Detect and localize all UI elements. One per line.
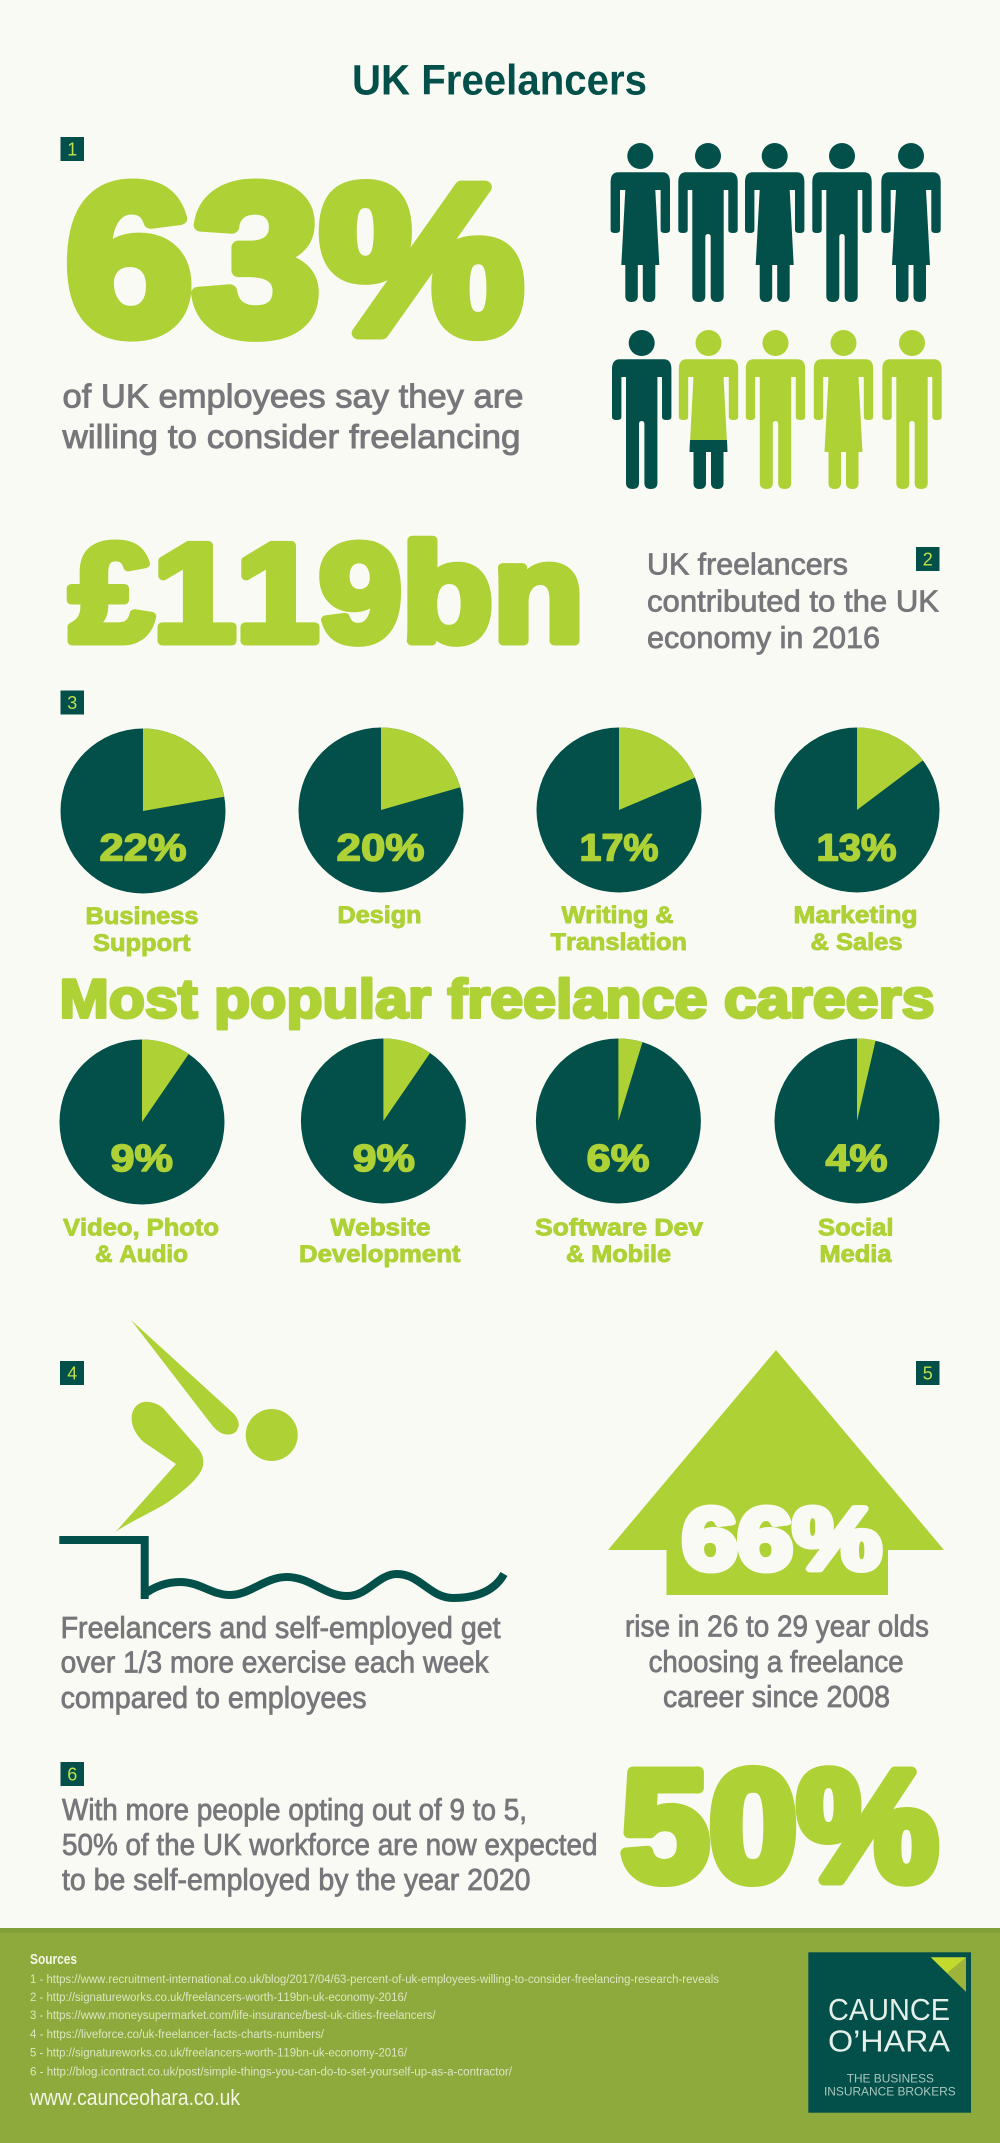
text: sources list: 4 - https://liveforce.co/uk-freelancer-facts-charts-numbers/ [30, 2029, 325, 2041]
text: rise description: choosing a freelance [649, 1644, 904, 1679]
title: UK Freelancers [352, 56, 647, 104]
pie chart: 9% Website Development: Development [299, 1241, 461, 1268]
badge 5 [916, 1361, 940, 1385]
pie chart: 17% Writing & Translation: Writing & [562, 902, 674, 929]
pie chart: 4% Social Media [774, 1038, 940, 1268]
pie chart: 22% Business Support: Support [93, 930, 191, 957]
text: workforce description [62, 1792, 598, 1897]
pie chart: 13% Marketing & Sales [774, 728, 940, 956]
panel: £119bn stat [70, 516, 940, 671]
pie chart: 20% Design [298, 728, 464, 929]
big number 50%: 50% [621, 1739, 938, 1914]
pie chart: 9% Website Development: 9% [352, 1138, 415, 1180]
pie chart: 9% Website Development [299, 1038, 466, 1268]
pie chart: 13% Marketing & Sales: & Sales [810, 929, 902, 956]
text: sources list: 2 - http://signatureworks.co.uk/freelancers-worth-119bn-uk-economy-2016/ [30, 1992, 408, 2004]
text: economy contribution [647, 547, 939, 655]
panel: exercise stat [59, 1320, 504, 1715]
pie chart: 9% Video, Photo & Audio: & Audio [95, 1241, 188, 1268]
text: workforce description: 50% of the UK workforce are now expected [62, 1827, 598, 1862]
badge 1 [60, 137, 84, 161]
row one of people [611, 143, 941, 302]
pie chart: 13% Marketing & Sales: 13% [816, 828, 896, 870]
text: exercise description: Freelancers and self-employed get [61, 1610, 501, 1645]
pie chart: 4% Social Media: Media [820, 1241, 892, 1268]
number 66%: 66% [682, 1491, 882, 1588]
text: sources list: 5 - http://signatureworks.co.uk/freelancers-worth-119bn-uk-economy-2016/ [30, 2048, 408, 2060]
text: workforce description: With more people opting out of 9 to 5, [62, 1792, 527, 1827]
badge 3: 3 [67, 693, 77, 713]
text: sources list: 3 - https://www.moneysupermarket.com/life-insurance/best-uk-cities-freelancers/ [30, 2010, 436, 2022]
text: economy contribution: UK freelancers [647, 547, 848, 582]
text: sources list [30, 1951, 719, 2079]
logo: Caunce O'Hara: CAUNCE [828, 1992, 950, 2027]
text: rise description: career since 2008 [663, 1679, 890, 1714]
badge 3 [60, 690, 84, 714]
panel: 63% stat [60, 137, 524, 455]
pie chart: 20% Design: Design [338, 902, 422, 929]
pie chart: 6% Software Dev & Mobile [535, 1038, 704, 1268]
text: sources list: Sources [30, 1951, 77, 1968]
text: economy contribution: economy in 2016 [647, 620, 880, 655]
pie chart: 6% Software Dev & Mobile: Software Dev [535, 1215, 704, 1242]
text: 63% description: willing to consider freelancing [61, 418, 521, 455]
pie chart: 17% Writing & Translation [536, 728, 702, 956]
panel: 50% workforce stat [60, 1739, 938, 1914]
badge 6: 6 [67, 1764, 77, 1784]
pie chart: 17% Writing & Translation: Translation [550, 929, 687, 956]
logo: Caunce O'Hara: INSURANCE BROKERS [824, 2084, 956, 2098]
text: exercise description: over 1/3 more exercise each week [61, 1645, 489, 1680]
icon: pool edge and water wave [59, 1540, 504, 1599]
pie chart: 20% Design: 20% [336, 828, 424, 870]
logo: Caunce O'Hara [808, 1952, 971, 2113]
footer band [0, 1928, 1000, 2143]
heading: most popular freelance careers: Most popular freelance careers [60, 968, 934, 1030]
pie chart: 6% Software Dev & Mobile: & Mobile [566, 1241, 671, 1268]
pie chart: 13% Marketing & Sales: Marketing [794, 902, 918, 929]
badge 4: 4 [67, 1364, 77, 1384]
pie chart: 22% Business Support: Business [86, 903, 198, 930]
pie chart: 9% Website Development: Website [330, 1215, 430, 1242]
text: sources list: 6 - http://blog.icontract.co.uk/post/simple-things-you-can-do-to-set-yourself-up-as-a-contractor/ [30, 2067, 513, 2079]
logo: Caunce O'Hara: O’HARA [828, 2024, 950, 2059]
panel: 66% rise stat [608, 1350, 944, 1714]
icon: diving swimmer [116, 1320, 298, 1532]
badge 2: 2 [923, 550, 933, 570]
logo: Caunce O'Hara: THE BUSINESS [847, 2072, 934, 2086]
big number £119bn: £119bn [70, 516, 584, 671]
big number 63%: 63% [66, 141, 524, 378]
pie chart: 17% Writing & Translation: 17% [580, 828, 658, 870]
badge 5: 5 [923, 1364, 933, 1384]
pie chart: 9% Video, Photo & Audio: 9% [110, 1138, 173, 1180]
pie chart: 9% Video, Photo & Audio [60, 1040, 224, 1268]
pie chart: 9% Video, Photo & Audio: Video, Photo [63, 1215, 219, 1242]
text: 63% description: of UK employees say they are [62, 378, 524, 415]
text: economy contribution: contributed to the UK [647, 583, 939, 618]
text: sources list: 1 - https://www.recruitment-international.co.uk/blog/2017/04/63-percent-of-uk-employees-willing-to-consider-freelancing-research-reveals [30, 1974, 719, 1986]
badge 1: 1 [67, 140, 77, 160]
icon: people pictogram [611, 143, 942, 489]
text: workforce description: to be self-employed by the year 2020 [62, 1862, 530, 1897]
row two of people [612, 330, 942, 489]
arrow: up arrow [608, 1350, 944, 1595]
text: 63% description [61, 378, 524, 455]
badge 6 [60, 1762, 84, 1786]
text: rise description [625, 1609, 929, 1714]
pie chart: 4% Social Media: Social [818, 1215, 894, 1242]
pie chart: 22% Business Support [60, 728, 226, 957]
pie chart: 4% Social Media: 4% [826, 1138, 888, 1180]
text: website: www.caunceohara.co.uk [29, 2085, 241, 2110]
pie chart: 22% Business Support: 22% [100, 828, 186, 870]
text: exercise description: compared to employees [61, 1680, 367, 1715]
badge 4 [60, 1361, 84, 1385]
panel: footer [0, 1928, 1000, 2143]
badge 2 [916, 547, 940, 571]
pie chart: 6% Software Dev & Mobile: 6% [586, 1138, 650, 1180]
text: exercise description [61, 1610, 501, 1715]
text: rise description: rise in 26 to 29 year olds [625, 1609, 929, 1644]
